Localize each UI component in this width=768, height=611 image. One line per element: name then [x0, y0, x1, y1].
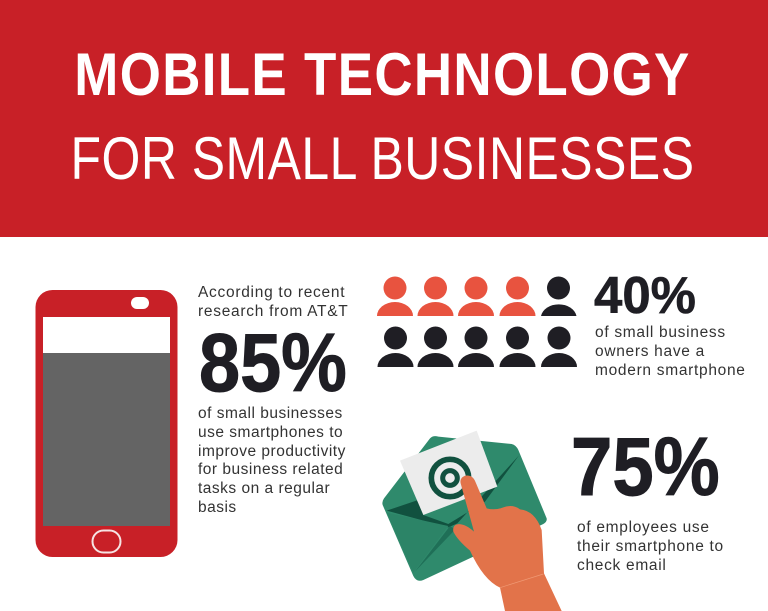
intro text: According to recent [198, 284, 345, 301]
icon: envelope with hand [382, 431, 562, 611]
hand [453, 475, 562, 611]
description: 85%: for business related [198, 461, 343, 478]
title line 2: FOR SMALL BUSINESSES [70, 125, 694, 192]
icon: people pictogram [377, 276, 577, 367]
title line 1: MOBILE TECHNOLOGY [74, 41, 691, 108]
icon: smartphone [36, 290, 178, 557]
description: 85%: basis [198, 499, 237, 516]
description: 85%: of small businesses [198, 405, 343, 422]
intro text: research from AT&T [198, 303, 348, 320]
description: 75% [577, 519, 724, 574]
description: 75%: of employees use [577, 519, 710, 536]
header banner [0, 0, 768, 237]
description: 85%: use smartphones to [198, 424, 343, 441]
intro text [198, 284, 348, 320]
description: 40% [595, 324, 746, 379]
description: 40%: of small business [595, 324, 726, 341]
description: 75%: their smartphone to [577, 538, 724, 555]
description: 85%: improve productivity [198, 443, 346, 460]
description: 85% [198, 405, 346, 516]
description: 75%: check email [577, 557, 667, 574]
stat: 75%: 75% [571, 420, 720, 513]
stat: 40%: 40% [594, 267, 696, 325]
description: 40%: modern smartphone [595, 362, 746, 379]
description: 40%: owners have a [595, 343, 705, 360]
stat: 85%: 85% [199, 316, 347, 409]
description: 85%: tasks on a regular [198, 480, 330, 497]
